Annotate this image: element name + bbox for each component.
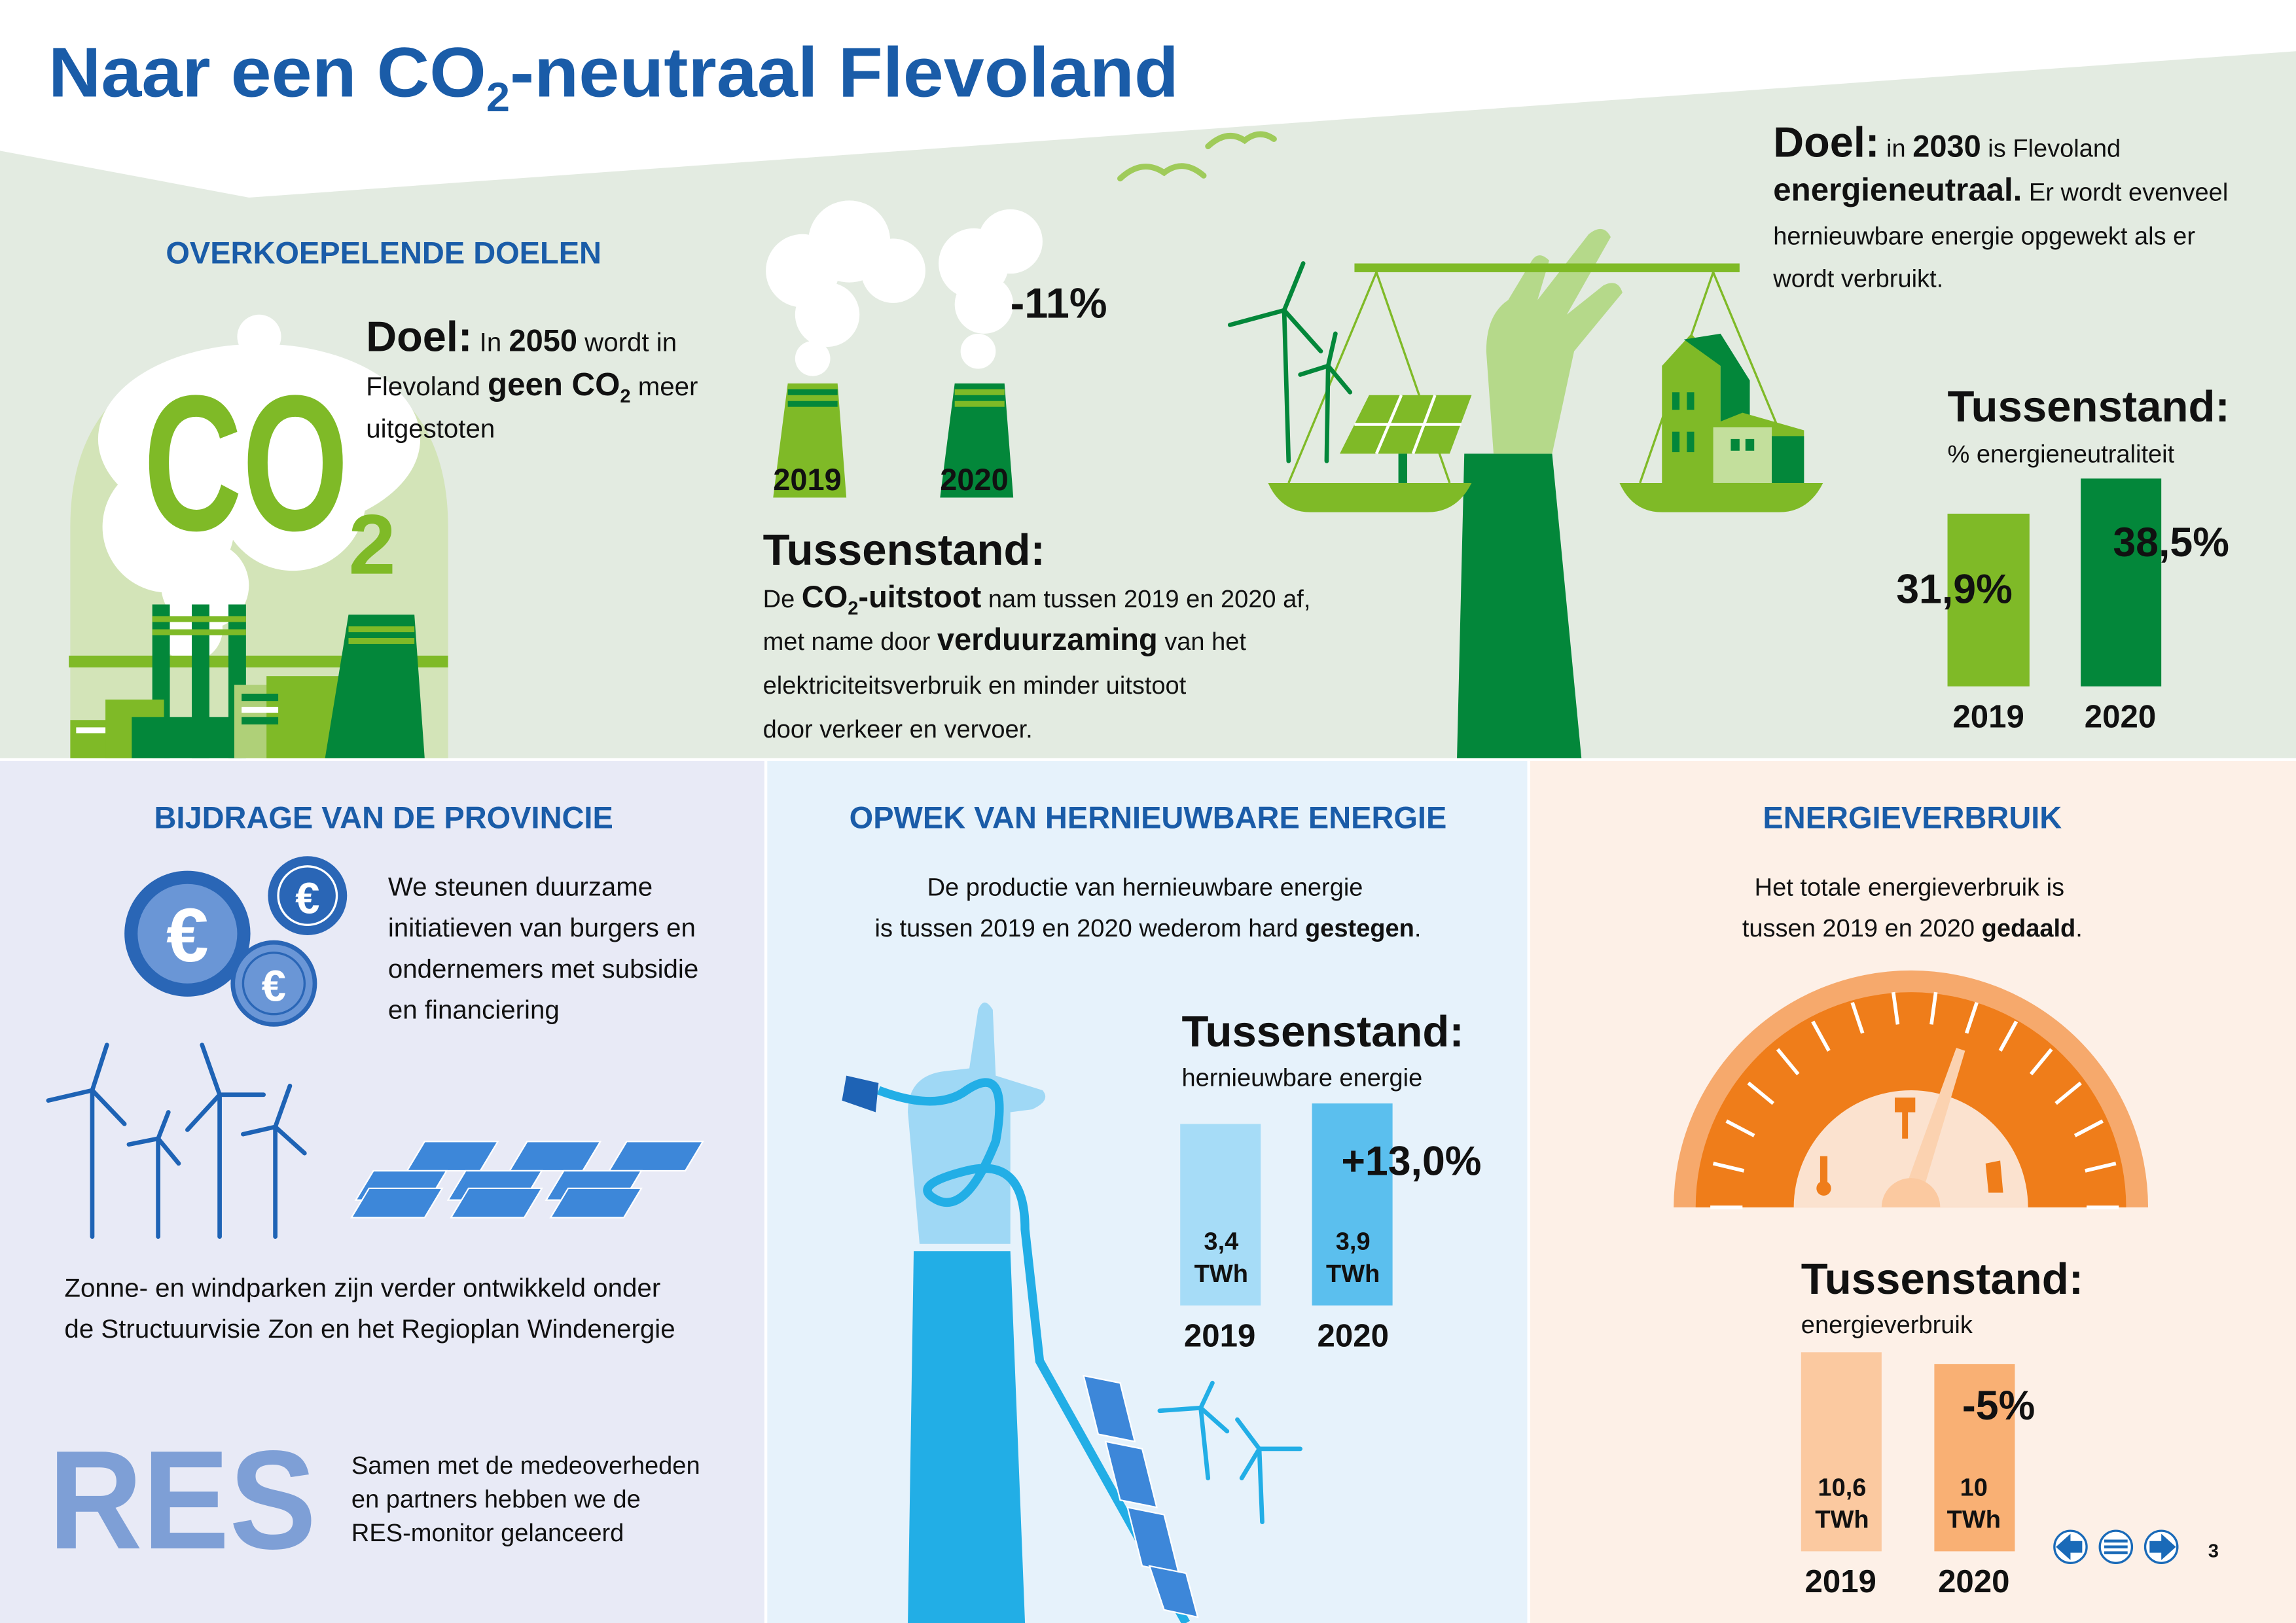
text: doel 2030	[1772, 118, 2228, 293]
text: tussenstand CO2: Tussenstand:	[763, 526, 1045, 575]
icon: birds	[1120, 134, 1274, 179]
icon: euro coins: €	[295, 874, 319, 923]
panel: opwek hernieuwbare energie: is tussen 2019 en 2020 wederom hard gestegen.	[875, 915, 1421, 942]
chart: hernieuwbare energie: Tussenstand:	[1181, 1007, 1464, 1056]
panel: bijdrage van de provincie: en partners hebben we de	[351, 1486, 641, 1513]
illustration: CO2 dome factory: 2	[348, 498, 396, 592]
text: tussenstand CO2: elektriciteitsverbruik en minder uitstoot	[763, 672, 1187, 700]
icon: euro coins: €	[262, 962, 286, 1011]
text: tussenstand CO2: door verkeer en vervoer.	[763, 716, 1033, 743]
panel: bijdrage van de provincie: We steunen duurzame	[388, 872, 653, 902]
chart: hernieuwbare energie: 3,4	[1204, 1228, 1238, 1256]
icon: euro coins	[124, 856, 347, 1024]
text: doel 2050: 2	[620, 386, 631, 407]
illustration: cooling towers 2019 2020	[766, 200, 1043, 497]
logo: RES: RES	[48, 1421, 316, 1578]
chart: hernieuwbare energie: TWh	[1326, 1260, 1380, 1288]
panel: bijdrage van de provincie	[48, 800, 703, 1578]
chart: hernieuwbare energie	[1180, 1007, 1481, 1353]
chart: energieverbruik: 10	[1960, 1474, 1988, 1501]
text: doel 2030: Doel: in 2030 is Flevoland	[1773, 118, 2121, 166]
panel: energieverbruik	[1674, 800, 2219, 1599]
text: tussenstand CO2	[763, 526, 1310, 743]
panel: opwek hernieuwbare energie: OPWEK VAN HERNIEUWBARE ENERGIE	[850, 800, 1446, 835]
panel: opwek hernieuwbare energie	[842, 800, 1481, 1623]
chart: hernieuwbare energie: 3,9	[1336, 1228, 1371, 1256]
illustration: cooling towers 2019 2020: 2020	[940, 462, 1009, 497]
panel: energieverbruik: Het totale energieverbruik is	[1755, 874, 2064, 902]
icon: euro coins: €	[166, 893, 209, 978]
icon: solar panels	[351, 1141, 703, 1218]
chart: energieverbruik: energieverbruik	[1801, 1311, 1973, 1339]
icon: navigation buttons	[2054, 1531, 2219, 1563]
text: tussenstand CO2: nam tussen 2019 en 2020 af,	[988, 586, 1310, 613]
chart: energieverbruik: 10,6	[1818, 1474, 1866, 1501]
chart: energieverbruik: TWh	[1815, 1507, 1869, 1534]
text: doel 2050: Doel: In 2050 wordt in	[366, 313, 677, 361]
panel: bijdrage van de provincie: initiatieven van burgers en	[388, 913, 696, 942]
panel: bijdrage van de provincie: BIJDRAGE VAN DE PROVINCIE	[154, 800, 613, 835]
chart: energieneutraliteit: 38,5%	[2113, 520, 2229, 565]
chart: energieneutraliteit: 31,9%	[1896, 566, 2013, 612]
icon: gauge	[1674, 971, 2148, 1207]
chart: hernieuwbare energie: hernieuwbare energie	[1181, 1064, 1422, 1092]
chart: energieverbruik	[1801, 1255, 2083, 1599]
panel: bijdrage van de provincie: ondernemers met subsidie	[388, 954, 698, 984]
text: doel 2030: wordt verbruikt.	[1772, 265, 1943, 293]
chart: energieneutraliteit: 2019	[1952, 698, 2024, 734]
illustration: hand with plug and cable	[842, 1003, 1300, 1623]
panel: opwek hernieuwbare energie: De productie van hernieuwbare energie	[927, 874, 1363, 902]
icon: navigation buttons: 3	[2208, 1541, 2219, 1561]
panel: energieverbruik: tussen 2019 en 2020 gedaald.	[1742, 915, 2083, 942]
title: -neutraal Flevoland	[510, 33, 1179, 112]
text: doel 2030: energieneutraal. Er wordt evenveel	[1773, 171, 2228, 207]
illustration: CO2 dome factory: CO	[143, 355, 348, 571]
chart: hernieuwbare energie: 2019	[1184, 1317, 1255, 1353]
illustration: cooling towers 2019 2020: 2019	[773, 462, 842, 497]
illustration: CO2 dome factory	[69, 315, 448, 758]
chart: hernieuwbare energie: 2020	[1317, 1317, 1389, 1353]
text: tussenstand CO2: 2	[848, 598, 858, 619]
text: doel 2030: hernieuwbare energie opgewekt als er	[1773, 223, 2195, 250]
panel: energieverbruik: ENERGIEVERBRUIK	[1763, 800, 2062, 835]
icon: wind turbines blue	[48, 1045, 304, 1237]
panel: bijdrage van de provincie: en financiering	[388, 995, 560, 1024]
chart: energieverbruik: Tussenstand:	[1801, 1255, 2083, 1304]
chart: energieneutraliteit: 2020	[2085, 698, 2156, 734]
chart: energieneutraliteit	[1896, 382, 2230, 734]
chart: energieverbruik: 2020	[1938, 1563, 2010, 1599]
chart: energieverbruik: 2019	[1804, 1563, 1876, 1599]
panel: bijdrage van de provincie: RES-monitor gelanceerd	[351, 1520, 624, 1547]
heading: overkoepelende doelen: OVERKOEPELENDE DOELEN	[166, 236, 601, 270]
chart: energieneutraliteit: Tussenstand:	[1948, 382, 2230, 431]
title	[48, 33, 1179, 120]
title: 2	[486, 75, 510, 120]
chart: hernieuwbare energie: TWh	[1194, 1260, 1248, 1288]
chart: energieverbruik: -5%	[1962, 1383, 2035, 1429]
text: doel 2050: uitgestoten	[366, 414, 495, 444]
text: doel 2050	[366, 313, 698, 444]
chart: hernieuwbare energie: +13,0%	[1341, 1139, 1481, 1185]
text: doel 2050: Flevoland geen CO	[366, 366, 620, 402]
panel: bijdrage van de provincie: de Structuurvisie Zon en het Regioplan Windenergie	[64, 1314, 675, 1344]
label: -11%: -11%	[1011, 279, 1107, 327]
panel: bijdrage van de provincie: Samen met de medeoverheden	[351, 1452, 700, 1480]
text: tussenstand CO2: met name door verduurzaming van het	[763, 622, 1246, 656]
panel: bijdrage van de provincie: Zonne- en windparken zijn verder ontwikkeld onder	[64, 1273, 660, 1302]
text: tussenstand CO2: -uitstoot	[858, 579, 982, 614]
title: Naar een CO	[48, 33, 470, 112]
illustration: balance with hand	[1230, 229, 1823, 758]
text: doel 2050: meer	[631, 372, 698, 401]
text: tussenstand CO2: De CO	[763, 579, 848, 614]
chart: energieverbruik: TWh	[1947, 1507, 2001, 1534]
chart: energieneutraliteit: % energieneutraliteit	[1948, 441, 2175, 469]
